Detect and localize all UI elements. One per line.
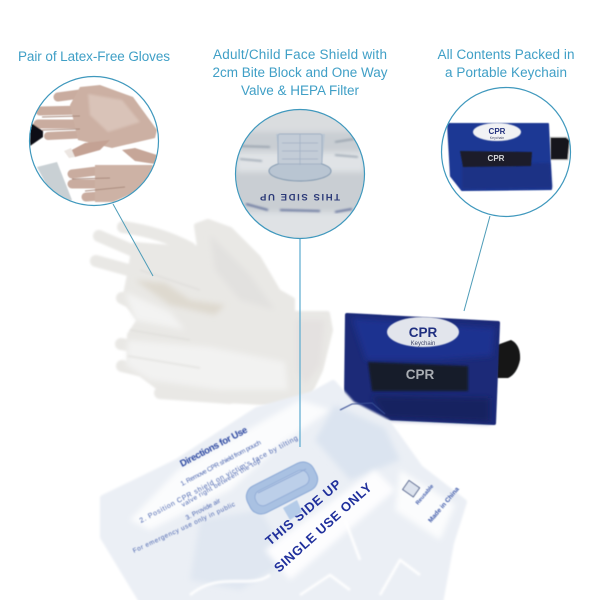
heading: keychain: a Portable Keychain [445,65,567,80]
circle: keychain close-up: CPR [489,127,506,136]
pouch oval logo [387,317,459,347]
bag text: directions for use [132,425,299,555]
photo: pair of gloves [96,222,330,403]
bag text: directions for use: For emergency use only in public [132,501,237,555]
heading: face shield: 2cm Bite Block and One Way [212,65,388,80]
circle: keychain close-up: Keychain [490,136,504,140]
heading: gloves: Pair of Latex-Free Gloves [18,49,170,64]
valve [242,458,322,520]
pouch label band [368,362,468,391]
mirrored bag text: THIS SIDE UP [259,191,340,202]
bag text: directions for use: Directions for Use [178,425,250,470]
bag text: made in china label: Reusable [415,484,435,506]
circle: keychain close-up [442,88,570,216]
pouch oval logo: CPR [409,325,437,340]
callout line: face shield [299,239,301,447]
bag film over pouch [340,403,385,414]
bag text: directions for use: 3. Provide air [185,497,222,522]
heading: keychain: All Contents Packed in [438,47,574,62]
heading: face shield: Valve & HEPA Filter [241,83,360,98]
bag text: made in china label [403,480,461,524]
circle: face shield close-up [236,105,365,240]
photo: keychain pouch [346,315,520,423]
bag text: made in china label: Made in China [427,486,461,524]
heading: face shield: Adult/Child Face Shield with [213,47,387,62]
pouch oval logo: Keychain [411,341,435,347]
callout line: keychain [464,216,490,311]
bag text: directions for use: 1. Remove CPR shield from pouch [180,439,263,488]
pouch strap [497,340,520,378]
circle: glove close-up [30,76,158,206]
photo: face shield bag [103,383,464,600]
circle: keychain close-up: CPR [488,154,505,163]
bag text: single use only: SINGLE USE ONLY [271,480,375,575]
heading: face shield [212,47,388,98]
heading: keychain [438,47,574,80]
callout line: gloves [113,204,153,276]
bag text: this side up: THIS SIDE UP [262,476,344,548]
bag text: directions for use: 2. Position CPR shield on victim's face by tilting [139,435,299,525]
pouch grey CPR: CPR [406,367,434,382]
bag text: directions for use: valve right between the top [180,457,262,509]
